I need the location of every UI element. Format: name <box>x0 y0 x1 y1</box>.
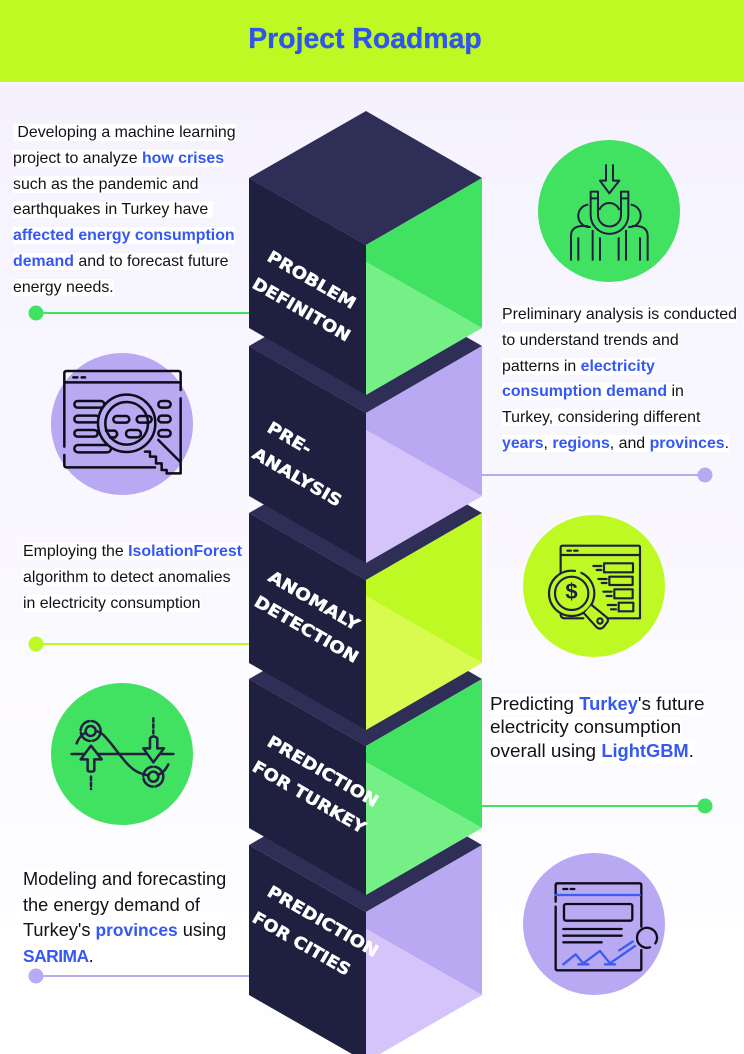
dollar sign: $ <box>565 579 578 604</box>
text block: problem definition: such as the pandemic and <box>13 176 199 192</box>
text block: anomaly detection: in electricity consumption <box>23 594 201 612</box>
header banner with title: Project Roadmap <box>248 23 482 55</box>
label: anomaly detection <box>251 567 364 667</box>
text block: prediction for Turkey <box>490 693 704 762</box>
text block: problem definition: energy needs. <box>13 278 114 296</box>
label: pre-analysis: ANALYSIS <box>249 444 345 510</box>
text block: pre-analysis: patterns in electricity <box>502 358 655 374</box>
label: problem definition: PROBLEM <box>264 247 359 313</box>
connector: problem definition <box>28 306 250 320</box>
text block: anomaly detection <box>23 543 242 612</box>
icon: report with trend line <box>523 853 665 995</box>
label: prediction for Turkey: PREDICTION <box>264 732 382 811</box>
cube: pre-analysis <box>249 279 482 563</box>
connector: anomaly detection <box>28 636 250 652</box>
text block: problem definition <box>13 124 236 296</box>
icon: magnet attracting people <box>538 140 680 282</box>
text block: problem definition: earthquakes in Turkey have <box>13 201 208 218</box>
cube: prediction for Turkey <box>249 612 482 895</box>
icon: window with magnifier <box>51 353 193 495</box>
text block: problem definition: demand and to forecast future <box>13 253 229 270</box>
text block: problem definition: project to analyze how crises <box>13 150 224 167</box>
label: anomaly detection: ANOMALY <box>265 567 364 635</box>
text block: anomaly detection: algorithm to detect anomalies <box>23 569 231 586</box>
header banner with title <box>0 0 744 82</box>
text block: pre-analysis: Preliminary analysis is conducted <box>502 306 737 323</box>
label: prediction for cities: PREDICTION <box>264 882 382 961</box>
text block: prediction for Turkey: electricity consumption <box>490 717 681 738</box>
cube: problem definition <box>249 111 482 395</box>
label: prediction for Turkey: FOR TURKEY <box>249 757 370 838</box>
text block: pre-analysis <box>502 306 737 452</box>
text block: pre-analysis: consumption demand in <box>502 383 684 400</box>
cube: anomaly detection <box>249 446 482 730</box>
text block: pre-analysis: Turkey, considering different <box>502 409 700 426</box>
text block: problem definition: affected energy consumption <box>13 227 235 244</box>
connector: prediction for Turkey <box>482 798 712 814</box>
text block: prediction for cities: SARIMA. <box>23 946 94 966</box>
text block: prediction for cities: Modeling and forecasting <box>23 869 226 889</box>
label: prediction for cities: FOR CITIES <box>249 908 354 979</box>
connector: prediction for cities <box>28 968 250 984</box>
text block: prediction for Turkey: Predicting Turkey's future <box>490 693 704 715</box>
label: prediction for Turkey <box>249 732 382 838</box>
text block: prediction for cities: Turkey's provinces using <box>23 920 226 940</box>
text block: prediction for cities <box>23 869 226 966</box>
label: anomaly detection: DETECTION <box>251 592 362 667</box>
text block: problem definition: Developing a machine learning <box>17 124 236 141</box>
text block: prediction for Turkey: overall using LightGBM. <box>490 740 694 762</box>
text block: pre-analysis: to understand trends and <box>502 332 679 349</box>
label: pre-analysis <box>249 418 345 510</box>
text block: pre-analysis: years, regions, and provinces. <box>502 435 729 452</box>
icon: wave with up and down arrows <box>51 683 193 825</box>
label: prediction for cities <box>249 882 382 979</box>
connector: pre-analysis <box>482 468 712 482</box>
text block: anomaly detection: Employing the IsolationForest <box>23 543 242 560</box>
icon: financial analysis window <box>523 515 665 657</box>
cube: prediction for cities <box>249 778 482 1054</box>
text block: prediction for cities: the energy demand of <box>23 895 200 915</box>
label: problem definition <box>249 247 359 345</box>
label: problem definition: DEFINITON <box>249 274 354 345</box>
label: pre-analysis: PRE- <box>264 418 315 458</box>
